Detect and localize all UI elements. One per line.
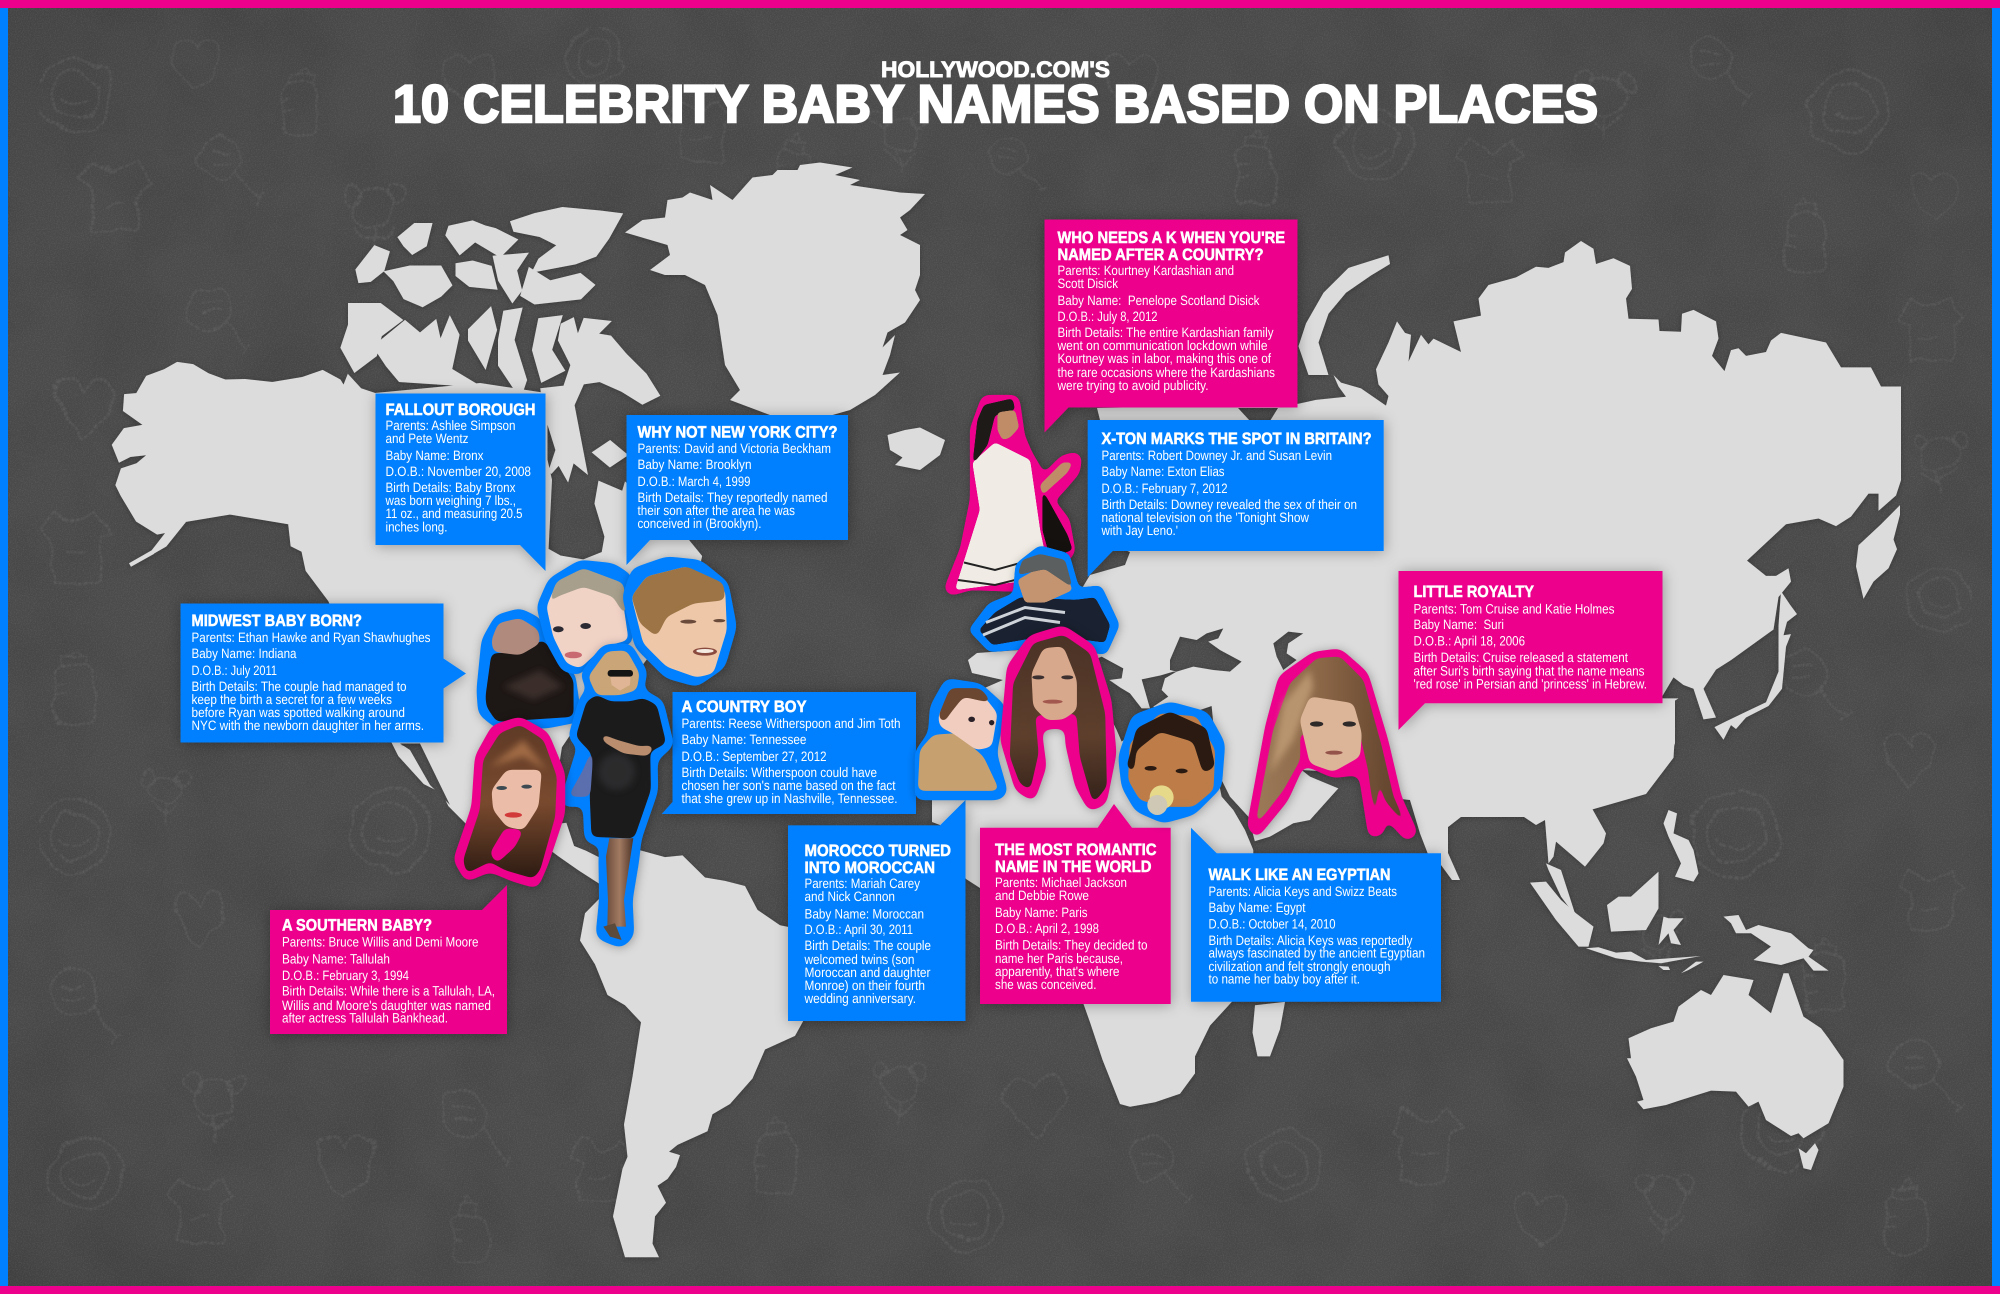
details: after Suri's birth saying that the name means — [1414, 663, 1645, 678]
photo: Exton — [971, 548, 1118, 652]
photo: Tallulah — [455, 718, 563, 887]
details: D.O.B.: September 27, 2012 — [682, 749, 826, 764]
border: bottom — [0, 1286, 2000, 1294]
details: inches long. — [386, 520, 448, 534]
heading: A SOUTHERN BABY? — [282, 917, 432, 935]
details: Birth Details: Cruise released a statement — [1414, 650, 1628, 665]
details: Baby Name: Bronx — [386, 448, 484, 463]
heading — [1058, 229, 1285, 264]
details: Baby Name: Tennessee — [682, 732, 806, 747]
details: Birth Details: The entire Kardashian family — [1058, 325, 1274, 340]
details: their son after the area he was — [638, 503, 795, 518]
callout: Little Royalty — [1398, 571, 1662, 730]
callout: Morocco Turned Into Moroccan — [788, 800, 966, 1021]
details: to name her baby boy after it. — [1208, 972, 1360, 987]
details: Baby Name: Tallulah — [282, 952, 390, 967]
heading: A COUNTRY BOY — [682, 698, 806, 716]
details — [1057, 263, 1275, 393]
details: 'red rose' in Persian and 'princess' in Hebrew. — [1414, 676, 1647, 691]
details: name her Paris because, — [995, 951, 1123, 966]
details: that she grew up in Nashville, Tennessee. — [682, 791, 898, 806]
details: D.O.B.: July 8, 2012 — [1058, 309, 1158, 324]
details: she was conceived. — [995, 977, 1096, 992]
details: Parents: Reese Witherspoon and Jim Toth — [682, 716, 900, 731]
details: Birth Details: Baby Bronx — [386, 480, 516, 495]
details: D.O.B.: March 4, 1999 — [638, 474, 750, 489]
details: civilization and felt strongly enough — [1208, 959, 1390, 974]
heading: WALK LIKE AN EGYPTIAN — [1208, 866, 1390, 884]
details: Birth Details: Alicia Keys was reportedly — [1208, 933, 1413, 948]
callout: Who Needs a K — [1044, 220, 1298, 432]
details: Parents: Bruce Willis and Demi Moore — [282, 935, 478, 950]
details: was born weighing 7 lbs., — [385, 493, 516, 508]
details: conceived in (Brooklyn). — [638, 516, 762, 531]
details: NYC with the newborn daughter in her arms. — [192, 718, 424, 733]
details — [282, 935, 495, 1026]
heading: MOROCCO TURNED — [804, 842, 951, 860]
callout: Walk Like an Egyptian — [1191, 828, 1441, 1002]
heading: FALLOUT BOROUGH — [386, 401, 536, 419]
details: Birth Details: Downey revealed the sex of their on — [1102, 497, 1357, 512]
details: Kourtney was in labor, making this one of — [1058, 351, 1271, 366]
details: Parents: Robert Downey Jr. and Susan Levin — [1102, 448, 1332, 463]
heading: INTO MOROCCAN — [804, 859, 935, 877]
details: D.O.B.: July 2011 — [192, 663, 277, 678]
photo: Indiana baby — [478, 610, 580, 727]
callout: Why Not New York City — [626, 415, 848, 565]
photo: Paris — [1002, 627, 1115, 810]
details: Baby Name: Egypt — [1208, 900, 1306, 915]
details: D.O.B.: April 2, 1998 — [995, 921, 1099, 936]
details: Parents: Ashlee Simpson — [386, 418, 516, 433]
heading: NAMED AFTER A COUNTRY? — [1058, 246, 1264, 264]
callout: X-Ton Marks the Spot — [1088, 420, 1384, 577]
details: Monroe) on their fourth — [804, 978, 925, 993]
details: Parents: David and Victoria Beckham — [638, 441, 831, 456]
callout: The Most Romantic Name — [980, 804, 1171, 1004]
details: and Debbie Rowe — [995, 888, 1089, 903]
details: D.O.B.: February 7, 2012 — [1102, 481, 1228, 496]
details — [682, 716, 900, 806]
details: Baby Name: Penelope Scotland Disick — [1058, 293, 1260, 308]
details: D.O.B.: April 18, 2006 — [1414, 634, 1525, 649]
details: were trying to avoid publicity. — [1057, 378, 1208, 393]
details: and Nick Cannon — [804, 889, 895, 904]
details: D.O.B.: April 30, 2011 — [804, 922, 913, 937]
details — [1414, 601, 1647, 691]
details: Willis and Moore's daughter was named — [282, 998, 491, 1013]
details: D.O.B.: February 3, 1994 — [282, 968, 409, 983]
border: left — [0, 8, 8, 1286]
callout: Midwest Baby Born — [180, 604, 466, 742]
heading: LITTLE ROYALTY — [1414, 583, 1534, 601]
heading: WHY NOT NEW YORK CITY? — [638, 424, 838, 442]
details — [638, 441, 831, 531]
details: 11 oz., and measuring 20.5 — [386, 506, 522, 521]
details: Birth Details: While there is a Tallulah, LA, — [282, 984, 495, 999]
photo: Bronx — [538, 562, 631, 673]
details — [1101, 448, 1357, 538]
border: right — [1992, 8, 2000, 1286]
details: national television on the 'Tonight Show — [1102, 510, 1309, 525]
details: welcomed twins (son — [804, 952, 914, 967]
details: Parents: Michael Jackson — [995, 875, 1127, 890]
heading — [995, 841, 1157, 876]
callout: Fallout Borough — [376, 394, 546, 571]
heading — [804, 842, 951, 877]
details: Parents: Ethan Hawke and Ryan Shawhughes — [192, 630, 431, 645]
border: top — [0, 0, 2000, 8]
details: wedding anniversary. — [804, 991, 916, 1006]
details: Birth Details: The couple — [804, 938, 931, 953]
details: went on communication lockdown while — [1057, 338, 1268, 353]
photo: Suri — [1248, 650, 1417, 840]
details: Parents: Tom Cruise and Katie Holmes — [1414, 601, 1615, 616]
details: Parents: Mariah Carey — [804, 876, 920, 891]
title: publisher line: HOLLYWOOD.COM'S — [881, 57, 1110, 82]
heading: X-TON MARKS THE SPOT IN BRITAIN? — [1102, 430, 1372, 448]
heading: MIDWEST BABY BORN? — [192, 612, 362, 630]
world map — [112, 162, 1902, 1259]
details: Parents: Kourtney Kardashian and — [1058, 263, 1234, 278]
details: Baby Name: Brooklyn — [638, 457, 752, 472]
details: keep the birth a secret for a few weeks — [192, 692, 392, 707]
details — [804, 876, 931, 1006]
details: Parents: Alicia Keys and Swizz Beats — [1208, 884, 1397, 899]
details: after actress Tallulah Bankhead. — [282, 1011, 448, 1026]
details: always fascinated by the ancient Egyptian — [1208, 946, 1425, 961]
details: Birth Details: They reportedly named — [638, 490, 828, 505]
details: before Ryan was spotted walking around — [192, 705, 405, 720]
details: Baby Name: Exton Elias — [1102, 464, 1225, 479]
details: with Jay Leno.' — [1101, 523, 1178, 538]
details: the rare occasions where the Kardashians — [1058, 365, 1275, 380]
heading: WHO NEEDS A K WHEN YOU'RE — [1058, 229, 1285, 247]
details: Baby Name: Paris — [995, 905, 1088, 920]
callout: A Southern Baby — [270, 885, 507, 1034]
details: Birth Details: Witherspoon could have — [682, 765, 877, 780]
details: Baby Name: Moroccan — [804, 906, 924, 921]
details: D.O.B.: October 14, 2010 — [1208, 917, 1336, 932]
photo: Kourtney Kardashian — [952, 398, 1074, 590]
details: chosen her son's name based on the fact — [682, 778, 896, 793]
details: and Pete Wentz — [386, 431, 469, 446]
details: apparently, that's where — [995, 964, 1120, 979]
photo: Brooklyn — [624, 558, 735, 685]
details — [995, 875, 1148, 992]
details: Baby Name: Suri — [1414, 617, 1504, 632]
photo: Egypt — [1120, 703, 1223, 822]
details — [385, 418, 531, 534]
heading: NAME IN THE WORLD — [995, 858, 1152, 876]
title — [393, 57, 1598, 134]
heading: THE MOST ROMANTIC — [995, 841, 1157, 859]
photo: Moroccan — [917, 680, 1006, 798]
details: Scott Disick — [1058, 276, 1118, 291]
details: Birth Details: They decided to — [995, 937, 1148, 952]
details — [192, 630, 431, 733]
photo: Reese Witherspoon — [568, 651, 666, 940]
details: Birth Details: The couple had managed to — [192, 679, 406, 694]
details — [1208, 884, 1425, 987]
details: Baby Name: Indiana — [192, 646, 297, 661]
callout: A Country Boy — [662, 692, 916, 814]
details: D.O.B.: November 20, 2008 — [386, 464, 531, 479]
details: Moroccan and daughter — [804, 965, 931, 980]
title: main heading: 10 CELEBRITY BABY NAMES BASED ON PLACES — [393, 75, 1598, 134]
